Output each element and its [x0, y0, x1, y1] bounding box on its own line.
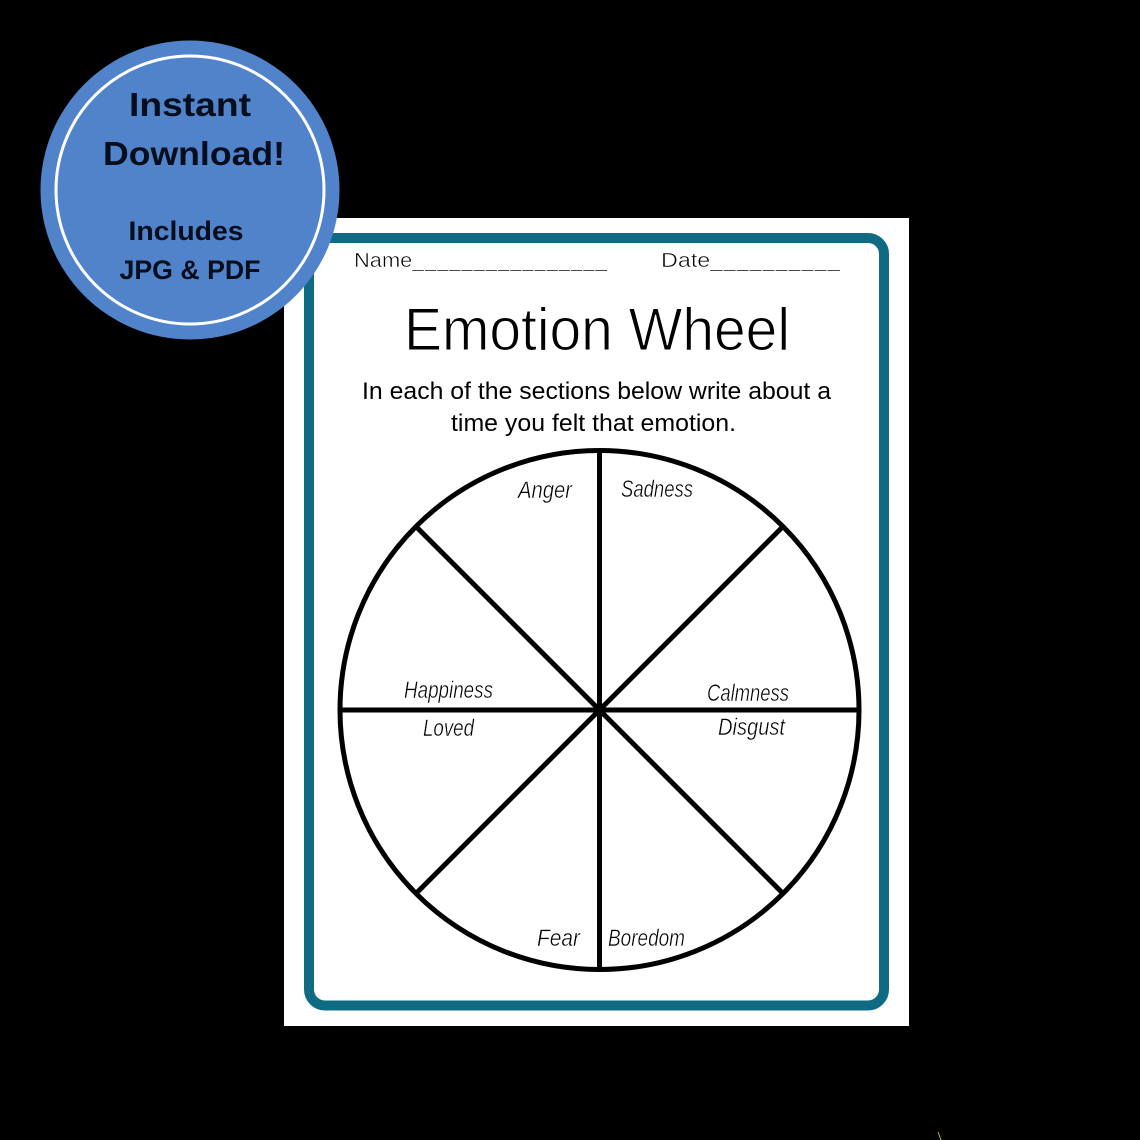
- badge headline: Download!: [103, 135, 285, 172]
- title: Emotion Wheel: [404, 296, 790, 363]
- wheel outline: [340, 450, 859, 970]
- wheel labels: Fear: [537, 925, 581, 952]
- wheel dividers: [340, 450, 859, 970]
- badge details: Includes: [128, 216, 244, 246]
- instructions: [362, 378, 832, 437]
- badge details: JPG & PDF: [120, 255, 260, 285]
- wheel labels: Calmness: [707, 680, 789, 707]
- wheel labels: Disgust: [718, 714, 786, 741]
- wheel labels: [404, 476, 789, 952]
- badge headline: Instant: [129, 86, 251, 123]
- wheel labels: Sadness: [621, 476, 693, 503]
- badge headline: [103, 86, 285, 172]
- teal page border: [309, 238, 884, 1006]
- instructions: In each of the sections below write about a: [362, 378, 832, 405]
- name field: Name________________: [354, 250, 608, 272]
- badge details: [120, 216, 260, 285]
- badge ring: [56, 56, 324, 324]
- stray yellow mark: [938, 1132, 941, 1140]
- badge: instant download: [40, 40, 340, 340]
- date field: Date__________: [661, 250, 841, 272]
- instructions: time you felt that emotion.: [451, 410, 736, 437]
- wheel labels: Happiness: [404, 677, 493, 704]
- wheel labels: Anger: [516, 477, 573, 504]
- emotion wheel: [340, 450, 859, 970]
- wheel labels: Loved: [423, 715, 475, 742]
- wheel labels: Boredom: [608, 925, 685, 952]
- worksheet page: [284, 218, 909, 1026]
